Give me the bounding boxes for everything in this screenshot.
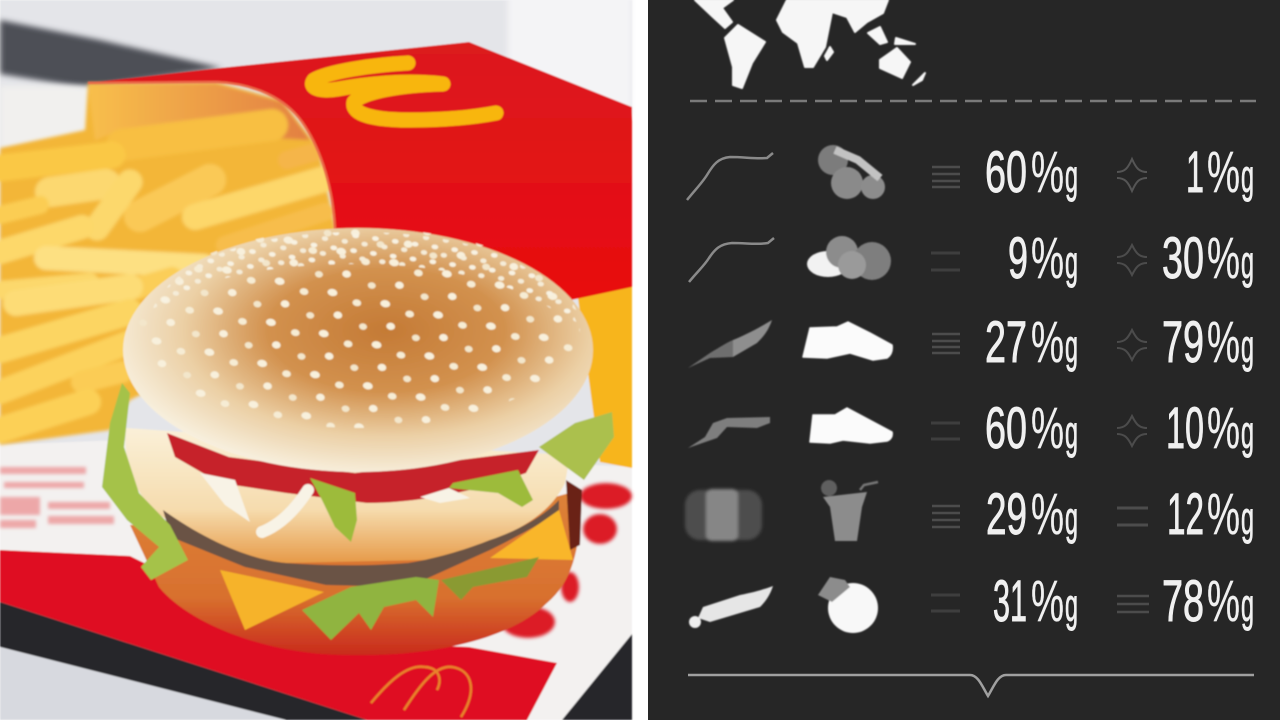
- value: 1%g: g: [1241, 150, 1254, 202]
- icon: diamond marker: [1117, 159, 1147, 191]
- dashed divider: [690, 100, 1256, 102]
- value: 9%g: %: [1031, 226, 1064, 291]
- value: 79%g: g: [1241, 320, 1254, 372]
- row 5: [685, 480, 1254, 547]
- value: 1%g: 1: [1186, 140, 1204, 205]
- icon: equals bars: [931, 253, 960, 270]
- value: 27%g: 27: [985, 310, 1027, 375]
- panel: dark nutrition panel: [648, 0, 1280, 720]
- value: 60%g: %: [1031, 140, 1064, 205]
- sesame seeds: [136, 228, 580, 428]
- icon: curved line: [689, 238, 774, 282]
- icon: round food: [818, 577, 878, 633]
- icon: food cluster: [807, 236, 891, 280]
- paper and tray: [0, 286, 632, 720]
- value: 29%g: g: [1065, 492, 1078, 544]
- row 1: [687, 140, 1254, 205]
- icon: equals bars: [932, 334, 960, 353]
- icon: golden arches on box: [312, 63, 496, 120]
- value: 30%g: 30: [1162, 226, 1204, 291]
- dark tray edge, top left: [0, 20, 222, 88]
- value: 1%g: [1186, 140, 1254, 205]
- dark inner edge: [566, 480, 582, 550]
- panel: burger and fries photo: [0, 0, 632, 720]
- value: 60%g: 60: [985, 140, 1027, 205]
- row 3: [688, 310, 1254, 375]
- value: 27%g: [985, 310, 1078, 375]
- icon: leaf shape: [688, 417, 770, 448]
- icon: shoe shape: [810, 408, 892, 443]
- value: 60%g: g: [1065, 406, 1078, 458]
- red paper band: [0, 550, 557, 720]
- value: 30%g: g: [1241, 236, 1254, 288]
- value: 60%g: [985, 140, 1078, 205]
- fries box: [88, 42, 632, 300]
- value: 79%g: %: [1207, 310, 1240, 375]
- value: 1%g: %: [1207, 140, 1240, 205]
- icon: equals bars: [931, 595, 960, 611]
- value: 31%g: g: [1065, 579, 1078, 631]
- bottom notched divider: [688, 675, 1254, 696]
- value: 60%g: %: [1031, 396, 1064, 461]
- value: 78%g: 78: [1162, 569, 1204, 634]
- icon: shoe shape: [803, 322, 892, 360]
- fries: [0, 82, 335, 445]
- icon: knife shape: [689, 586, 773, 628]
- icon: diamond marker: [1117, 330, 1147, 360]
- bottom bun: [130, 490, 580, 655]
- icon: equals bars: [932, 167, 960, 187]
- icon: equals marker: [1117, 596, 1149, 612]
- value: 12%g: 12: [1167, 482, 1204, 547]
- icon: equals marker: [1117, 508, 1148, 525]
- row 4: [688, 396, 1254, 461]
- icon: drink cup: [821, 480, 878, 541]
- value: 78%g: g: [1241, 579, 1254, 631]
- printed pink text on paper: [0, 467, 114, 528]
- icon: equals bars: [931, 423, 960, 439]
- value: 31%g: %: [1031, 569, 1064, 634]
- top bun: [123, 228, 593, 472]
- value: 78%g: %: [1207, 569, 1240, 634]
- value: 9%g: 9: [1008, 226, 1028, 291]
- value: 9%g: g: [1065, 236, 1078, 288]
- row 6: [689, 569, 1254, 634]
- icon: leaf shape: [688, 320, 772, 368]
- icon: diamond marker: [1117, 416, 1147, 446]
- middle bun: [125, 428, 570, 563]
- value: 60%g: [985, 396, 1078, 461]
- icon: arches on paper: [371, 667, 471, 717]
- value: 10%g: %: [1207, 396, 1240, 461]
- icon: equals bars: [932, 506, 960, 527]
- value: 31%g: 31: [993, 569, 1027, 634]
- row 2: [689, 226, 1254, 291]
- cheese slices: [220, 570, 324, 630]
- icon: curved line: [687, 153, 773, 200]
- value: 30%g: %: [1207, 226, 1240, 291]
- value: 79%g: 79: [1162, 310, 1204, 375]
- value: 60%g: g: [1065, 150, 1078, 202]
- ketchup: [167, 433, 539, 503]
- ketchup splashes: [501, 483, 632, 638]
- icon: diamond marker: [1117, 245, 1147, 275]
- value: 60%g: 60: [985, 396, 1027, 461]
- mayo and onion: [200, 473, 470, 522]
- burger: [102, 228, 614, 655]
- lettuce pieces: [102, 383, 614, 640]
- icon: food cluster: [818, 145, 885, 199]
- value: 27%g: g: [1065, 320, 1078, 372]
- value: 29%g: %: [1031, 482, 1064, 547]
- value: 9%g: [1008, 226, 1078, 291]
- black tray band: [0, 602, 367, 720]
- patty: [163, 500, 559, 587]
- icon: rounded block: [685, 489, 762, 541]
- value: 10%g: 10: [1166, 396, 1204, 461]
- value: 10%g: g: [1241, 406, 1254, 458]
- value: 29%g: 29: [986, 482, 1027, 547]
- value: 12%g: g: [1241, 492, 1254, 544]
- icon: world map: [695, 0, 925, 88]
- value: 27%g: %: [1031, 310, 1064, 375]
- value: 12%g: %: [1207, 482, 1240, 547]
